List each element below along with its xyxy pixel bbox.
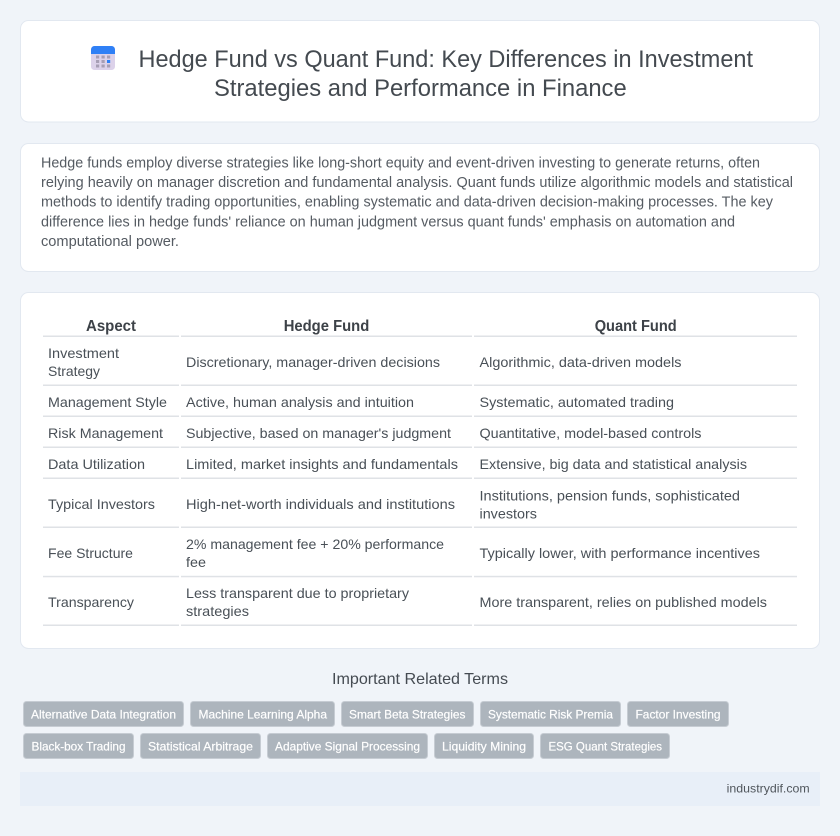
tag: systematic risk premia <box>480 702 620 726</box>
panel: header <box>20 20 820 122</box>
row: fee structure: Typically lower, with performance incentives <box>480 545 760 561</box>
row: transparency <box>43 585 797 626</box>
intro text: methods to identify trading opportunities, enabling systematic and data-driven decision-making processes. The key <box>41 195 774 211</box>
tag: statistical arbitrage: Statistical Arbitrage <box>148 739 253 753</box>
table header: Aspect <box>86 318 137 335</box>
related term tags <box>24 702 728 758</box>
tag: smart beta strategies: Smart Beta Strategies <box>349 707 466 721</box>
tag: esg quant strategies: ESG Quant Strategies <box>548 739 662 753</box>
row: investment strategy: Discretionary, manager-driven decisions <box>186 354 440 370</box>
row: investment strategy: Investment <box>48 345 119 361</box>
tag: black-box trading: Black-box Trading <box>32 739 126 753</box>
tag: alternative data integration <box>24 702 184 726</box>
row: fee structure: 2% management fee + 20% performance <box>186 536 444 552</box>
intro text: difference lies in hedge funds' reliance on human judgment versus quant funds' emphasis on automation and <box>41 214 735 230</box>
row: typical investors <box>43 488 797 528</box>
row: typical investors: High-net-worth individuals and institutions <box>186 496 455 512</box>
row: typical investors: investors <box>480 506 537 522</box>
row: management style: Active, human analysis and intuition <box>186 394 414 410</box>
heading: important related terms: Important Related Terms <box>332 671 508 688</box>
table header: Quant Fund <box>595 318 677 335</box>
row: fee structure: Fee Structure <box>48 545 133 561</box>
row: data utilization <box>43 456 797 479</box>
title <box>138 46 753 102</box>
row: transparency: More transparent, relies on published models <box>480 594 767 610</box>
tag: smart beta strategies <box>342 702 474 726</box>
tag: black-box trading <box>24 734 134 758</box>
tag: machine learning alpha: Machine Learning Alpha <box>198 707 327 721</box>
tag: factor investing: Factor Investing <box>636 707 720 721</box>
tag: liquidity mining: Liquidity Mining <box>442 739 526 753</box>
row: management style <box>43 394 797 417</box>
row: risk management <box>43 425 797 448</box>
footer <box>20 772 820 806</box>
row: typical investors: Typical Investors <box>48 496 155 512</box>
tag: factor investing <box>628 702 728 726</box>
tag: statistical arbitrage <box>140 734 260 758</box>
row: management style: Management Style <box>48 394 167 410</box>
row: data utilization: Extensive, big data and statistical analysis <box>480 456 747 472</box>
tag: liquidity mining <box>434 734 534 758</box>
intro text: Hedge funds employ diverse strategies like long-short equity and event-driven investing to generate returns, often <box>41 156 760 172</box>
intro text: relying heavily on manager discretion and fundamental analysis. Quant funds utilize algorithmic models and statistical <box>41 175 793 191</box>
tag: alternative data integration: Alternative Data Integration <box>31 707 176 721</box>
row: management style: Systematic, automated trading <box>480 394 674 410</box>
footer: industrydif.com <box>727 782 810 796</box>
row: investment strategy: Strategy <box>48 363 100 379</box>
tag: esg quant strategies <box>540 734 670 758</box>
table header <box>43 318 797 337</box>
row: fee structure <box>43 536 797 577</box>
icon: calendar <box>91 46 115 70</box>
row: transparency: Less transparent due to proprietary <box>186 585 409 601</box>
panel: comparison table <box>20 292 820 648</box>
row: investment strategy: Algorithmic, data-driven models <box>480 354 682 370</box>
row: investment strategy <box>43 345 797 386</box>
row: transparency: Transparency <box>48 594 134 610</box>
intro text: computational power. <box>41 234 179 250</box>
row: fee structure: fee <box>186 554 206 570</box>
intro text <box>41 156 793 250</box>
row: risk management: Subjective, based on manager's judgment <box>186 425 451 441</box>
tag: adaptive signal processing <box>268 734 428 758</box>
row: data utilization: Data Utilization <box>48 456 145 472</box>
row: risk management: Quantitative, model-based controls <box>480 425 702 441</box>
row: data utilization: Limited, market insights and fundamentals <box>186 456 458 472</box>
tag: adaptive signal processing: Adaptive Signal Processing <box>275 739 420 753</box>
tag: systematic risk premia: Systematic Risk Premia <box>488 707 613 721</box>
row: typical investors: Institutions, pension funds, sophisticated <box>480 488 740 504</box>
row: transparency: strategies <box>186 603 249 619</box>
title: Strategies and Performance in Finance <box>214 75 627 102</box>
tag: machine learning alpha <box>190 702 334 726</box>
panel: introduction <box>20 144 820 272</box>
title: Hedge Fund vs Quant Fund: Key Differences in Investment <box>138 46 753 73</box>
row: risk management: Risk Management <box>48 425 163 441</box>
table header: Hedge Fund <box>284 318 369 335</box>
